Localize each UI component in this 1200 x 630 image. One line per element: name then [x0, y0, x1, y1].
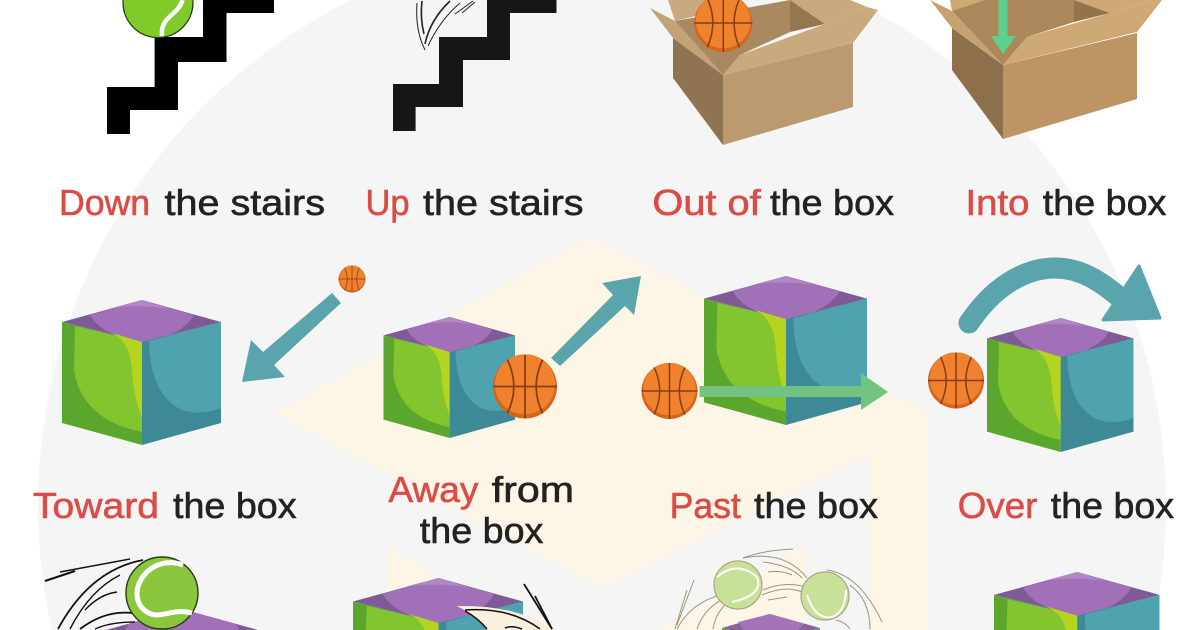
panel: past the box	[642, 276, 888, 526]
caption	[958, 485, 1174, 526]
panel: into the box	[930, 0, 1166, 223]
arrow: away	[551, 276, 641, 366]
arrow: down	[991, 0, 1016, 54]
caption: the box	[1051, 485, 1174, 526]
icon: basketball	[338, 265, 366, 292]
caption	[670, 485, 878, 526]
caption: Out of	[652, 182, 762, 223]
caption: Into	[966, 182, 1029, 223]
caption	[652, 182, 894, 223]
caption: Up	[366, 182, 410, 223]
icon: stairs	[393, 0, 556, 131]
caption	[33, 485, 297, 526]
caption	[59, 182, 325, 223]
icon: motion trail	[417, 1, 475, 50]
panel: bottom row, ball around cube	[675, 549, 882, 630]
caption: the box	[420, 510, 543, 551]
caption	[388, 469, 574, 551]
caption: Down	[59, 182, 150, 223]
caption: Over	[958, 485, 1037, 526]
arrow: past	[700, 373, 888, 410]
background cream chevrons	[274, 237, 927, 630]
icon: cardboard box	[930, 0, 1162, 139]
icon: cube	[62, 300, 221, 445]
icon: motion trails	[675, 549, 882, 629]
caption: the box	[173, 485, 297, 526]
icon: cube	[704, 276, 867, 425]
caption: from	[492, 469, 574, 510]
icon: basketball	[642, 363, 698, 419]
panel: out of the box	[650, 0, 894, 223]
panel: away from the box	[384, 276, 641, 551]
panel: bottom row, ball across cube	[353, 578, 553, 630]
caption: the box	[754, 485, 878, 526]
icon: basketball	[493, 354, 557, 418]
icon: motion trail	[457, 584, 553, 630]
icon: tennis ball	[123, 0, 193, 38]
caption: the box	[770, 182, 894, 223]
icon: cube top	[353, 578, 523, 630]
caption: the box	[1043, 182, 1166, 223]
panel: up the stairs	[366, 0, 584, 223]
icon: cube	[384, 317, 515, 438]
icon: cube top	[994, 572, 1160, 630]
caption: the stairs	[164, 182, 325, 223]
caption: the stairs	[423, 182, 584, 223]
panel: bottom row, ball onto cube	[45, 557, 258, 630]
caption: Toward	[33, 485, 159, 526]
icon: tennis ball, faded	[801, 572, 849, 620]
arrow: toward	[242, 293, 341, 382]
icon: stairs	[107, 0, 274, 134]
icon: basketball	[694, 0, 752, 52]
caption: Away	[388, 469, 478, 510]
panel: toward the box	[33, 265, 366, 526]
icon: motion trail	[45, 559, 143, 629]
icon: cardboard box	[650, 0, 878, 145]
icon: cube top	[722, 614, 820, 630]
icon: cube	[987, 318, 1134, 452]
icon: cube top	[106, 609, 258, 630]
panel: over the box	[928, 266, 1174, 526]
caption	[966, 182, 1166, 223]
panel: down the stairs	[59, 0, 325, 223]
icon: tennis ball, faded	[714, 561, 762, 609]
arrow: over	[969, 266, 1160, 323]
icon: tennis ball	[126, 557, 198, 629]
caption	[366, 182, 584, 223]
panel: bottom row, cube at right	[994, 572, 1160, 630]
icon: basketball	[928, 352, 984, 408]
caption: Past	[670, 485, 741, 526]
